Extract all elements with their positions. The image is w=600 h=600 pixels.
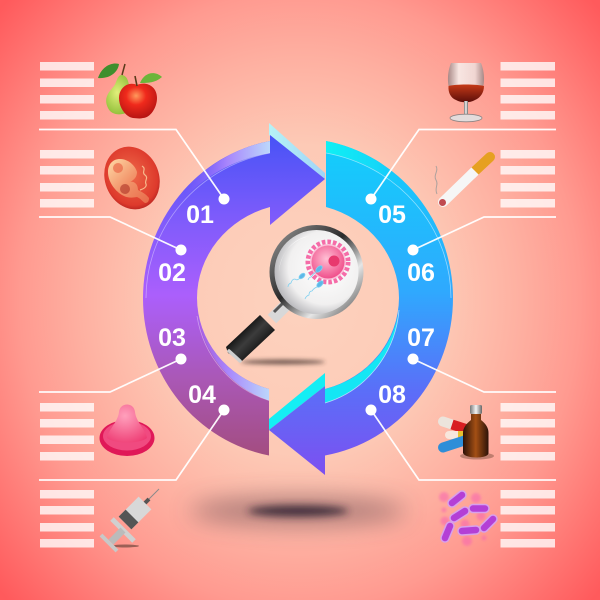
number 03: 03 <box>158 324 186 352</box>
icon: bacteria <box>439 492 493 546</box>
number 02: 02 <box>158 259 186 287</box>
icon: medicine bottle and pills <box>443 405 494 460</box>
text placeholder bars: embryo group <box>40 150 94 208</box>
icon: apple and pear <box>98 64 162 118</box>
connector 06 <box>408 217 556 256</box>
icon: magnifying glass with egg and sperm <box>226 225 364 364</box>
sperm <box>288 265 324 299</box>
arrow ring <box>143 123 453 475</box>
number 06: 06 <box>407 259 435 287</box>
icon: syringe <box>101 489 159 551</box>
handle <box>226 303 288 361</box>
number 01: 01 <box>186 201 214 229</box>
text placeholder bars: wine group <box>500 62 555 120</box>
icon: embryo <box>95 138 169 218</box>
number 08: 08 <box>378 381 406 409</box>
connector 03 <box>39 354 186 392</box>
handle shadow <box>241 360 325 364</box>
text placeholder bars: apple group <box>40 62 94 120</box>
connector 07 <box>408 354 556 392</box>
text placeholder bars: condom group <box>40 403 94 460</box>
text placeholder bars: medicine group <box>500 403 555 460</box>
connector 08 <box>366 404 556 480</box>
number 05: 05 <box>378 201 406 229</box>
text placeholder bars: syringe group <box>40 490 94 548</box>
right arrow: blue <box>269 141 453 475</box>
icon: wine glass <box>448 63 484 122</box>
connector 05 <box>366 130 556 204</box>
number 07: 07 <box>407 324 435 352</box>
icon: condom <box>100 404 154 456</box>
leaf left <box>98 64 119 78</box>
connector 01 <box>39 130 230 204</box>
leaf right <box>140 73 162 83</box>
egg <box>308 242 348 282</box>
text placeholder bars: bacteria group <box>500 490 555 548</box>
pills <box>443 422 466 448</box>
floor shadow <box>190 497 406 525</box>
connector 04 <box>39 404 230 480</box>
number 04: 04 <box>188 381 216 409</box>
text placeholder bars: cigarette group <box>500 150 555 208</box>
bottle <box>460 452 494 460</box>
left arrow: purple <box>143 123 325 456</box>
pear <box>106 75 134 114</box>
icon: cigarette <box>435 157 490 206</box>
apple <box>119 84 157 118</box>
connector 02 <box>39 217 186 256</box>
lens <box>270 225 364 319</box>
